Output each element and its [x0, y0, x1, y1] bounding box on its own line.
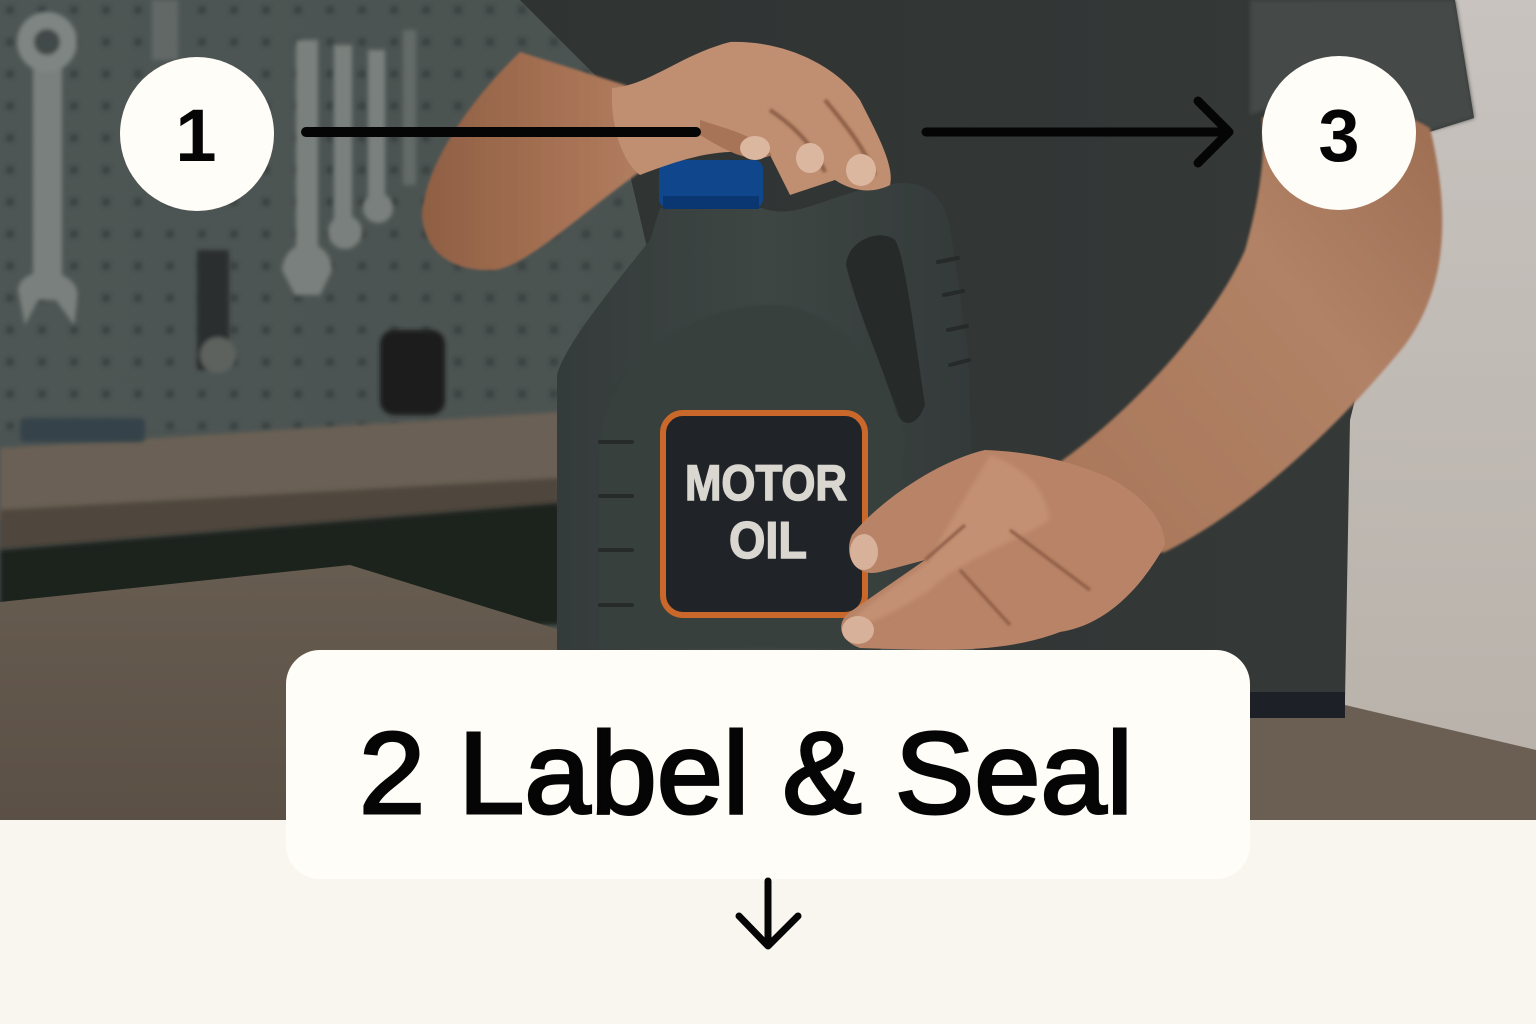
bottle blue cap	[659, 160, 763, 209]
photo: shirt sleeve highlight	[1250, 0, 1474, 130]
badge: step 3: 3	[1318, 94, 1360, 177]
bottle handle opening	[846, 235, 925, 423]
bottle front panel	[600, 305, 905, 648]
photo: person's left arm	[422, 52, 700, 270]
badge: step 3	[1262, 56, 1416, 210]
callout: 2 Label & Seal: 2 Label & Seal	[359, 708, 1133, 838]
arrow line 1	[301, 127, 701, 137]
bottle body	[557, 183, 972, 650]
photo: person's shirt	[520, 0, 1474, 700]
photo: counter	[0, 565, 1536, 820]
bottle grip ribs	[600, 258, 969, 605]
bottle label: MOTOR	[685, 455, 847, 511]
arrow line to step 3	[926, 101, 1229, 163]
photo: bottom hand	[841, 450, 1165, 650]
photo: motor oil bottle	[557, 160, 972, 650]
arrow: down	[739, 881, 798, 946]
bottom cream panel	[0, 820, 1536, 1024]
photo: person's right arm	[1060, 103, 1442, 553]
bottle label: OIL	[729, 512, 807, 570]
badge: step 1	[120, 57, 274, 211]
callout: 2 Label & Seal	[286, 650, 1250, 879]
bottle label	[663, 413, 865, 615]
badge: step 1: 1	[175, 94, 217, 177]
photo: top hand on cap	[612, 42, 891, 195]
icon: blurred wrenches on pegboard	[17, 0, 445, 442]
